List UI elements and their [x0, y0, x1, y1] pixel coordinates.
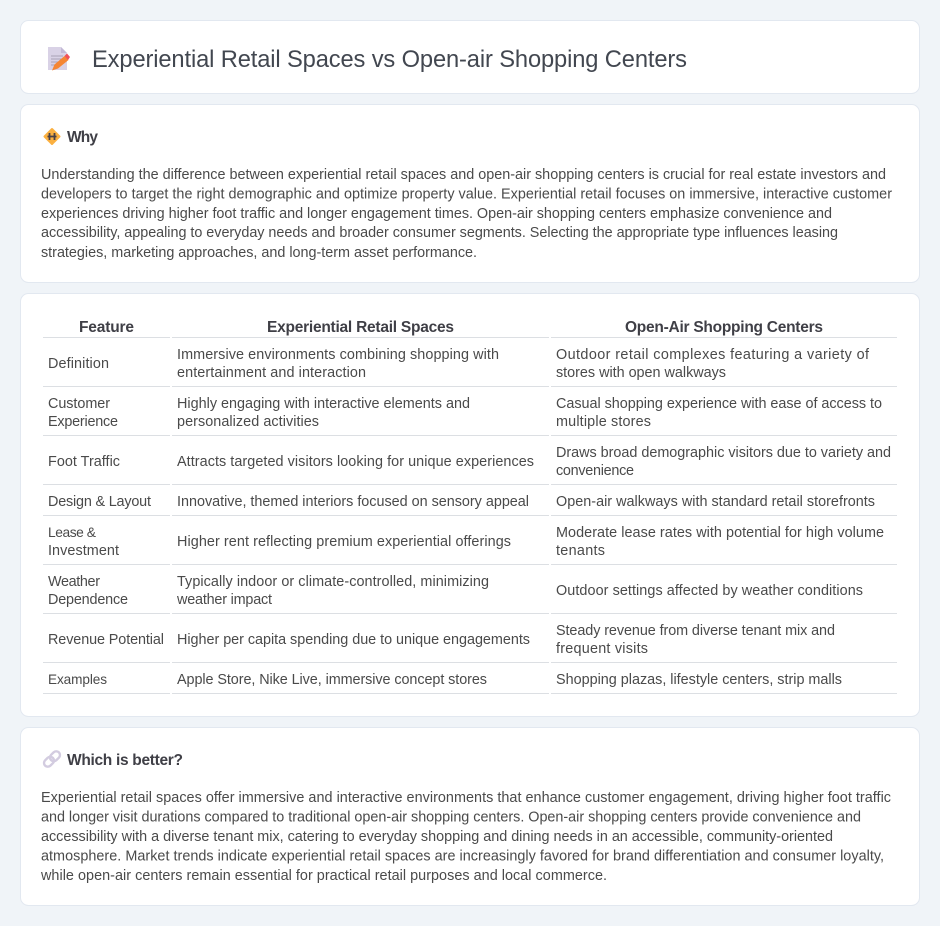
row: customer experience: Customer — [48, 396, 110, 412]
icon: document with pencil — [48, 47, 70, 70]
row: lease and investment: Lease & — [48, 525, 96, 540]
text block: which is better paragraph: Experiential retail spaces offer immersive and interactive environments that enhance customer engagement, driving higher foot traffic — [41, 790, 891, 806]
panel: comparison table — [20, 294, 920, 716]
row: customer experience: Highly engaging with interactive elements and — [177, 396, 470, 412]
row: definition: Immersive environments combining shopping with — [177, 347, 499, 363]
panel: which is better — [20, 728, 920, 906]
row: weather dependence: Outdoor settings affected by weather conditions — [556, 583, 863, 599]
row: customer experience: personalized activities — [177, 414, 319, 430]
row: definition: stores with open walkways — [556, 365, 726, 381]
text block: which is better paragraph: atmosphere. Market trends indicate experiential retail spaces are increasingly favored for brand differentiation and consumer loyalty, — [41, 848, 884, 864]
row: lease and investment: Investment — [48, 543, 119, 559]
row: customer experience: Experience — [48, 414, 118, 430]
text block: why paragraph: developers to target the right demographic and optimize property value. Experiential retail focuses on immersive, interactive customer — [41, 186, 892, 202]
table header row: Open-Air Shopping Centers — [625, 319, 823, 336]
text block: which is better paragraph — [40, 790, 891, 884]
row: revenue potential: Revenue Potential — [48, 632, 164, 648]
row: customer experience — [48, 396, 882, 430]
text block: why paragraph: experiences driving higher foot traffic and longer engagement times. Open-air shopping centers emphasize convenience and — [41, 206, 832, 222]
row: examples — [48, 672, 842, 688]
table header row: Feature — [79, 319, 134, 336]
panel: why — [20, 104, 920, 282]
row: definition: Outdoor retail complexes featuring a variety of — [556, 347, 870, 363]
icon: orange diamond — [44, 129, 60, 144]
row: revenue potential — [48, 623, 835, 657]
table header row: Experiential Retail Spaces — [267, 319, 454, 336]
row: foot traffic: convenience — [556, 463, 634, 479]
heading: why: Why — [67, 129, 98, 146]
row: customer experience: multiple stores — [556, 414, 651, 430]
row: foot traffic: Draws broad demographic visitors due to variety and — [556, 445, 891, 461]
row: definition — [48, 347, 870, 381]
row: definition: entertainment and interaction — [177, 365, 366, 381]
row: weather dependence: Typically indoor or climate-controlled, minimizing — [177, 574, 489, 590]
heading: which is better: Which is better? — [67, 752, 183, 769]
table header row — [79, 319, 823, 336]
row: weather dependence: Dependence — [48, 592, 128, 608]
title: Experiential Retail Spaces vs Open-air Shopping Centers — [92, 47, 687, 73]
row: design and layout: Open-air walkways with standard retail storefronts — [556, 494, 875, 510]
row: customer experience: Casual shopping experience with ease of access to — [556, 396, 882, 412]
row: examples: Examples — [48, 672, 107, 687]
row: lease and investment: Higher rent reflecting premium experiential offerings — [177, 534, 511, 550]
text block: why paragraph: accessibility, appealing to everyday needs and broader consumer segments. Selecting the appropriate type influences leasing — [41, 225, 838, 241]
text block: why paragraph: Understanding the difference between experiential retail spaces and open-air shopping centers is crucial for real estate investors and — [41, 167, 886, 183]
row: lease and investment: tenants — [556, 543, 605, 559]
text block: why paragraph: strategies, marketing approaches, and long-term asset performance. — [41, 245, 477, 261]
row: examples: Shopping plazas, lifestyle centers, strip malls — [556, 672, 842, 688]
row: design and layout — [48, 494, 875, 510]
row: design and layout: Design & Layout — [48, 494, 151, 510]
row: lease and investment: Moderate lease rates with potential for high volume — [556, 525, 884, 541]
row: foot traffic: Foot Traffic — [48, 454, 120, 470]
row: revenue potential: Higher per capita spending due to unique engagements — [177, 632, 530, 648]
row: foot traffic — [48, 445, 891, 479]
row: design and layout: Innovative, themed interiors focused on sensory appeal — [177, 494, 529, 510]
text block: which is better paragraph: and longer visit durations compared to traditional open-air shopping centers. Open-air shopping centers provide convenience and — [41, 810, 861, 826]
row: revenue potential: Steady revenue from diverse tenant mix and — [556, 623, 835, 639]
row: weather dependence — [48, 574, 863, 608]
panel: header — [20, 20, 920, 94]
icon: chain link — [42, 750, 62, 768]
row: definition: Definition — [48, 356, 109, 372]
row: revenue potential: frequent visits — [556, 641, 648, 657]
text block: which is better paragraph: accessibility with a diverse tenant mix, catering to everyday shopping and dining needs in an accessible, community-oriented — [41, 829, 833, 845]
text block: which is better paragraph: while open-air centers remain essential for practical retail purposes and local commerce. — [40, 868, 607, 884]
row: examples: Apple Store, Nike Live, immersive concept stores — [177, 672, 487, 688]
row: foot traffic: Attracts targeted visitors looking for unique experiences — [177, 454, 534, 470]
row: lease and investment — [48, 525, 884, 559]
row: weather dependence: Weather — [48, 574, 100, 590]
text block: why paragraph — [41, 167, 892, 261]
row: weather dependence: weather impact — [176, 592, 272, 608]
